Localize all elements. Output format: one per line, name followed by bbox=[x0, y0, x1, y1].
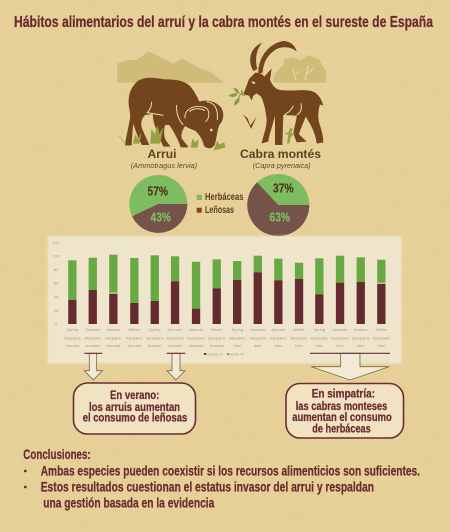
x axis labels: Autumn bbox=[271, 327, 285, 332]
x axis labels: Autumn bbox=[189, 327, 203, 332]
callout: En verano: el consumo de leñosas bbox=[83, 413, 187, 425]
label: Arrui: Arrui bbox=[148, 147, 176, 161]
x axis labels: Aoudad bbox=[127, 343, 141, 348]
x axis labels: Aoudad bbox=[168, 343, 182, 348]
x axis labels: Allopatric bbox=[291, 336, 307, 340]
chart legend: Woody % bbox=[206, 352, 223, 356]
pie chart: arrui: 43% bbox=[150, 210, 171, 224]
x axis labels: Sympatric bbox=[352, 336, 370, 340]
pie chart: cabra bbox=[247, 174, 309, 236]
x axis labels: Sympatric bbox=[331, 336, 349, 340]
y axis labels: 40 bbox=[54, 294, 59, 299]
callout: En verano: los arruis aumentan bbox=[89, 402, 180, 414]
conclusions: Conclusiones: bbox=[23, 447, 91, 462]
chart legend: Herbs % bbox=[228, 352, 244, 356]
x axis labels: Winter bbox=[129, 327, 141, 332]
y axis labels: 60 bbox=[54, 281, 59, 286]
x axis labels: Spring bbox=[149, 327, 160, 332]
y axis labels bbox=[53, 240, 60, 326]
x axis labels: Ibex bbox=[254, 343, 261, 348]
x axis labels: Spring bbox=[232, 327, 243, 332]
x axis labels: Sympatric bbox=[372, 336, 390, 340]
x axis labels: Winter bbox=[376, 327, 388, 332]
callout: En simpatría: En simpatría: bbox=[312, 389, 375, 401]
x axis labels: Allopatric bbox=[229, 336, 246, 340]
callout: En verano bbox=[74, 383, 196, 434]
pie legend: Herbáceas bbox=[205, 192, 244, 203]
icon: mountains bbox=[117, 52, 224, 83]
x axis labels: Ibex bbox=[234, 343, 241, 348]
y axis labels: 100 bbox=[53, 254, 60, 258]
conclusions bbox=[23, 447, 420, 511]
x axis labels: Ibex bbox=[295, 343, 303, 348]
label: Cabra montés bbox=[240, 147, 321, 170]
icon: arrui sheep bbox=[119, 78, 225, 150]
callout: En simpatría: las cabras monteses bbox=[296, 401, 387, 413]
x axis labels: Sympatric bbox=[166, 336, 184, 340]
x axis labels: Sympatric bbox=[310, 336, 328, 340]
label: Cabra montés: (Capra pyrenaica) bbox=[253, 161, 311, 170]
x axis labels: Ibex bbox=[316, 343, 323, 348]
x axis labels: Aoudad bbox=[65, 343, 79, 348]
x axis labels: Winter bbox=[211, 327, 223, 332]
x axis labels: Ibex bbox=[336, 343, 344, 348]
x axis labels: Spring bbox=[314, 327, 325, 332]
x axis labels: Summer bbox=[167, 327, 183, 332]
x axis labels: Allopatric bbox=[84, 336, 101, 340]
panel: stacked bar chart bbox=[48, 236, 402, 364]
x axis labels: Summer bbox=[332, 327, 348, 332]
x axis labels: Winter bbox=[293, 327, 305, 332]
arrow: right summer bbox=[167, 353, 185, 380]
pie chart: arrui bbox=[129, 175, 187, 233]
callout: En verano: En verano: bbox=[110, 390, 159, 402]
arrow: sympatry bbox=[310, 353, 390, 380]
y axis labels: 80 bbox=[54, 267, 59, 272]
bars bbox=[68, 255, 385, 324]
pie chart: arrui: 57% bbox=[148, 184, 168, 198]
pie chart: cabra: 37% bbox=[273, 182, 294, 196]
x axis labels bbox=[64, 327, 390, 348]
callout: En simpatría: aumentan el consumo bbox=[292, 412, 392, 424]
x axis labels: Autumn bbox=[354, 327, 368, 332]
label: Cabra montés: Cabra montés bbox=[240, 147, 321, 161]
x axis labels: Ibex bbox=[357, 343, 364, 348]
x axis labels: Autumn bbox=[106, 327, 120, 332]
x axis labels: Summer bbox=[250, 327, 266, 332]
arrow: left summer bbox=[84, 353, 102, 380]
callout: En simpatría: de herbáceas bbox=[312, 423, 371, 435]
y axis labels: 0 bbox=[55, 322, 58, 326]
pie chart: cabra: 63% bbox=[270, 210, 290, 224]
x axis labels: Ibex bbox=[378, 343, 385, 348]
x axis labels: Aoudad bbox=[148, 343, 162, 348]
icon: cabra goat bbox=[229, 41, 323, 145]
x axis labels: Allopatric bbox=[249, 336, 266, 340]
label: Arrui bbox=[131, 147, 198, 170]
label: Arrui: (Ammotragus lervia) bbox=[131, 161, 198, 170]
x axis labels: Summer bbox=[85, 327, 101, 332]
x axis labels: Allopatric bbox=[64, 336, 81, 340]
x axis labels: Allopatric bbox=[126, 336, 143, 340]
x axis labels: Spring bbox=[67, 327, 78, 332]
pie legend: Leñosas bbox=[205, 205, 234, 216]
x axis labels: Ibex bbox=[275, 343, 282, 348]
pie legend bbox=[197, 192, 244, 216]
x axis labels: Aoudad bbox=[86, 343, 100, 348]
x axis labels: Sympatric bbox=[146, 336, 164, 340]
x axis labels: Sympatric bbox=[208, 336, 226, 340]
x axis labels: Allopatric bbox=[270, 336, 287, 340]
x axis labels: Aoudad bbox=[106, 343, 120, 348]
y axis labels: 20 bbox=[54, 308, 59, 313]
y axis labels: 120 bbox=[53, 240, 60, 245]
x axis labels: Aoudad bbox=[210, 343, 224, 348]
chart legend bbox=[204, 352, 244, 356]
x axis labels: Sympatric bbox=[187, 336, 205, 340]
conclusions: una gestión basada en la evidencia bbox=[43, 496, 215, 511]
callout: En simpatría bbox=[286, 384, 404, 438]
icon: bush bbox=[273, 55, 326, 83]
x axis labels: Allopatric bbox=[105, 336, 122, 340]
x axis labels: Aoudad bbox=[189, 343, 203, 348]
